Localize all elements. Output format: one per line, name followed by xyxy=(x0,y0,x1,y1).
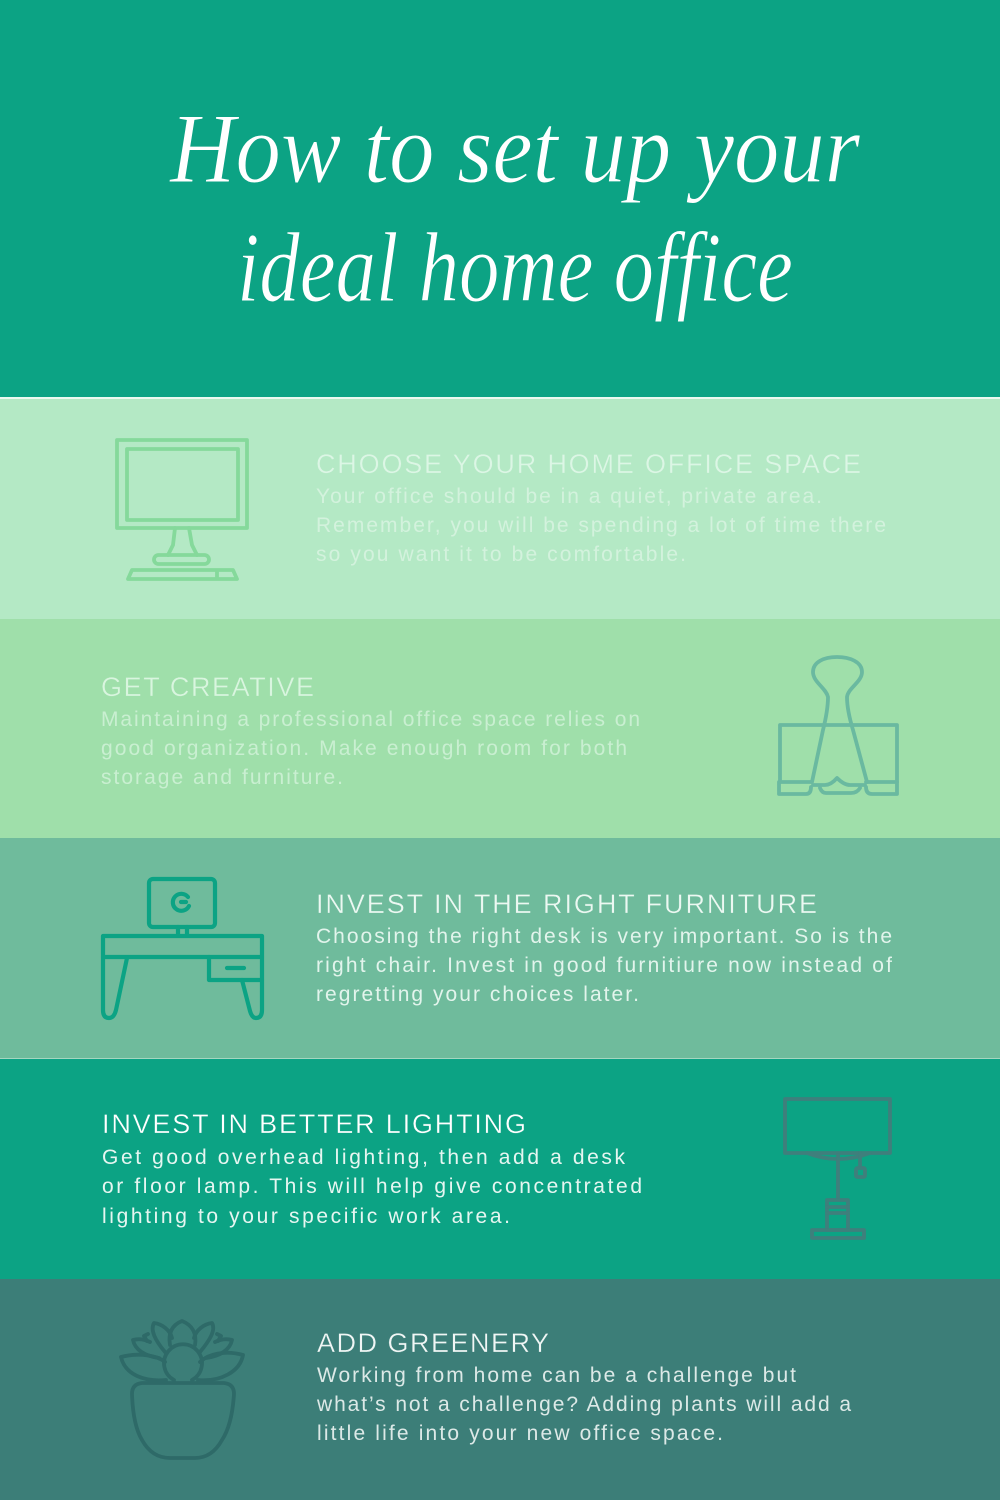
panel: invest in the right furniture xyxy=(0,838,1000,1059)
text block: choose your home office space xyxy=(316,485,886,566)
text block: invest in better lighting xyxy=(102,1146,642,1228)
panel: get creative xyxy=(0,619,1000,838)
text block: invest in better lighting: Get good overhead lighting, then add a desk xyxy=(102,1146,626,1169)
heading: get creative: GET CREATIVE xyxy=(101,672,314,702)
panel: invest in better lighting xyxy=(0,1059,1000,1279)
heading: invest in better lighting: INVEST IN BETTER LIGHTING xyxy=(102,1109,526,1139)
text block: add greenery: Working from home can be a challenge but xyxy=(317,1364,796,1387)
panel: add greenery xyxy=(0,1279,1000,1500)
text block: invest in better lighting: lighting to your specific work area. xyxy=(102,1205,510,1228)
title: ideal home office xyxy=(237,212,793,323)
text block: invest in the right furniture: regretting your choices later. xyxy=(316,983,639,1006)
icon: desk with computer xyxy=(103,879,262,1018)
text block: choose your home office space: Remember, you will be spending a lot of time there xyxy=(316,514,886,537)
text block: get creative: Maintaining a professional office space relies on xyxy=(101,708,640,731)
title xyxy=(168,93,861,323)
text block: choose your home office space: Your office should be in a quiet, private area. xyxy=(316,485,822,508)
text block: invest in the right furniture: right chair. Invest in good furnitiure now instead of xyxy=(316,954,892,977)
icon: desktop monitor xyxy=(117,440,247,579)
heading: add greenery: ADD GREENERY xyxy=(317,1328,549,1358)
text block: invest in better lighting: or floor lamp. This will help give concentrated xyxy=(102,1175,642,1198)
text block: invest in the right furniture xyxy=(316,925,892,1006)
text block: add greenery: little life into your new office space. xyxy=(317,1422,723,1445)
icon: binder clip xyxy=(779,657,897,794)
icon: table lamp xyxy=(785,1099,890,1238)
text block: get creative xyxy=(101,708,640,789)
heading: choose your home office space: CHOOSE YOUR HOME OFFICE SPACE xyxy=(316,449,861,479)
heading: invest in the right furniture: INVEST IN THE RIGHT FURNITURE xyxy=(316,889,817,919)
icon: potted succulent xyxy=(121,1321,243,1458)
text block: invest in the right furniture: Choosing the right desk is very important. So is the xyxy=(316,925,892,948)
text block: get creative: storage and furniture. xyxy=(101,766,343,789)
text block: add greenery xyxy=(316,1364,851,1445)
title: How to set up your xyxy=(168,93,861,204)
panel: choose your home office space xyxy=(0,399,1000,619)
text block: choose your home office space: so you want it to be comfortable. xyxy=(316,543,686,566)
text block: get creative: good organization. Make enough room for both xyxy=(101,737,627,760)
panel: title header xyxy=(0,0,1000,397)
text block: add greenery: what’s not a challenge? Adding plants will add a xyxy=(316,1393,851,1416)
